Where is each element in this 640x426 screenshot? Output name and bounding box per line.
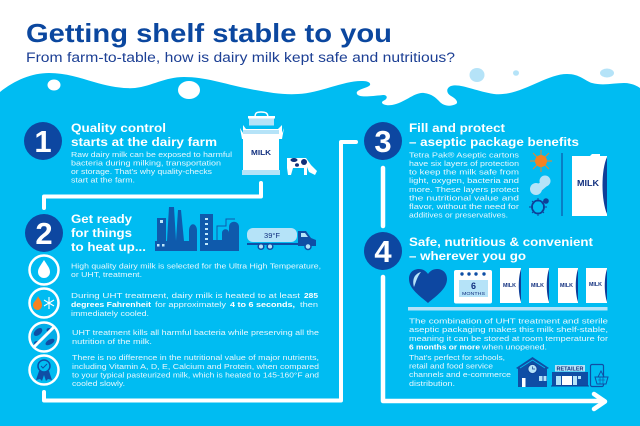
number badge 1 [24,122,62,160]
text: kills bacteria: UHT treatment kills all harmful bacteria while preserving all the [72,330,319,337]
text: heating: then [300,302,318,309]
number badge 4: 4 [374,234,392,269]
body text 1: bacteria during milking, transportation [71,160,221,168]
body text 3: flavor, without the need for [409,204,520,211]
icon: school [516,357,549,387]
body text 4: aseptic packaging makes this milk shelf-stable, [409,327,608,334]
icon: retailer store [551,365,589,386]
number badge 3: 3 [374,124,392,159]
heading 4: Safe, nutritious & convenient [409,235,593,249]
heading 1 [71,121,217,149]
icon: carton row: MILK [589,282,602,288]
number badge 4 [364,232,402,270]
subtitle: From farm-to-table, how is dairy milk kept safe and nutritious? [26,50,455,65]
icon: milk drop [30,256,58,284]
heading 2: Get ready [71,212,132,226]
text: selection: or UHT, treatment. [71,272,142,279]
icon: factory [155,207,239,251]
body text 4 continued: distribution. [409,381,455,388]
text: heating: 285 [304,293,318,300]
text: heating: immediately cooled. [71,311,149,318]
text: nutrition comparison: There is no difference in the nutritional value of major nutrients, [72,355,319,362]
heading 2: for things [71,226,132,240]
icon: six month calendar: MONTHS [462,291,485,296]
step 2 panel [25,207,321,388]
body text 3: more. These layers protect [409,187,519,194]
icon: phone and basket [590,364,608,386]
body text 4 [409,318,609,352]
divider rule [562,153,563,216]
text: selection [71,264,321,279]
number badge 2 [25,214,63,252]
icon: carton row: MILK [531,283,544,289]
icon: carton row: MILK [503,283,516,289]
icon: carton row [500,268,607,303]
heading 2 [71,212,146,254]
icon: six month calendar [454,270,492,304]
number badge 3 [364,122,402,160]
body text 4: meaning it can be stored at room temperature for [409,336,609,343]
step 3 panel [364,121,607,220]
body text 4: 6 months or more [409,344,480,352]
heading 3 [409,121,579,149]
text: heating [71,293,318,318]
icon: milk can [240,112,284,175]
icon: milk carton [572,154,607,216]
body text 3: to keep the milk safe from [409,170,519,177]
body text 4: The combination of UHT treatment and sterile [409,318,608,326]
body text 3: have six layers of protection [409,161,519,168]
text: heating: for approximately [155,302,227,309]
icon: oxygen molecule [530,176,550,195]
body text 3: the nutritional value and [409,195,519,202]
body text 4 continued: That's perfect for schools, [409,355,505,362]
icon: six month calendar: 6 [471,281,476,291]
body text 3: additives or preservatives. [409,213,508,220]
text: kills bacteria [72,330,319,346]
icon: retailer store: RETAILER [556,366,584,372]
icon: quality ribbon [30,356,58,384]
body text 4 continued [409,355,511,388]
body text 4 continued: retail and food service [409,364,493,371]
milk droplets [48,68,614,99]
body text 1 [71,152,233,184]
heading 3: – aseptic package benefits [409,135,579,149]
text: heating: 4 to 6 seconds, [230,302,295,309]
divider bar [408,307,608,310]
icon: milk carton: MILK [577,178,600,188]
icon: refrigerated milk truck [247,228,316,250]
connector: step 2 to step 3 [44,142,356,400]
connector: step 1 to step 2 [44,183,261,208]
text: heating: degrees Fahrenheit [71,302,152,309]
body text 4 continued: channels and e-commerce [409,372,511,379]
number badge 2: 2 [35,216,53,251]
body text 1: Raw dairy milk can be exposed to harmful [71,152,233,159]
text: nutrition comparison: to your typical pasteurized milk, which is heated to 145-160°F and [72,372,319,380]
body text 1: start at the farm. [71,178,135,184]
icon: flame and snowflake [30,288,58,318]
icon: refrigerated milk truck: 39°F [264,231,280,240]
icon: sun [530,150,552,172]
heading 2: to heat up... [71,240,146,254]
body text 3: Tetra Pak® Aseptic cartons [409,152,520,160]
body text 4: when unopened. [481,344,547,352]
icon: milk can: MILK [251,150,271,157]
text: kills bacteria: nutrition of the milk. [72,339,152,346]
heading 4 [409,235,593,263]
icon: no bacteria [30,322,58,352]
icon: cow [287,158,317,175]
step 1 panel [24,112,317,184]
body text 1: or storage. That's why quality-checks [71,169,213,176]
text: heating: During UHT treatment, dairy milk is heated to at least [71,293,300,300]
connector: step 3 to step 4 [381,168,385,226]
number badge 1: 1 [34,124,52,159]
text: nutrition comparison: including Vitamin A, D, E, Calcium and Protein, when compared [72,364,319,371]
heading 3: Fill and protect [409,121,505,135]
step 4 panel [364,232,609,388]
arrow: step 4 to end [383,277,605,409]
text: nutrition comparison: cooled slowly. [72,381,125,388]
icon: bacteria [529,198,549,216]
heading 1: Quality control [71,121,166,135]
title: Getting shelf stable to you [26,18,392,48]
body text 3: light, oxygen, bacteria and [409,178,519,185]
body text 3 [409,152,520,220]
heading 4: – wherever you go [409,249,526,263]
text: selection: High quality dairy milk is selected for the Ultra High Temperature, [71,264,321,270]
icon: carton row: MILK [560,283,573,289]
text: nutrition comparison [72,355,319,388]
heading 1: starts at the dairy farm [71,135,217,149]
icon: heart [409,269,447,303]
